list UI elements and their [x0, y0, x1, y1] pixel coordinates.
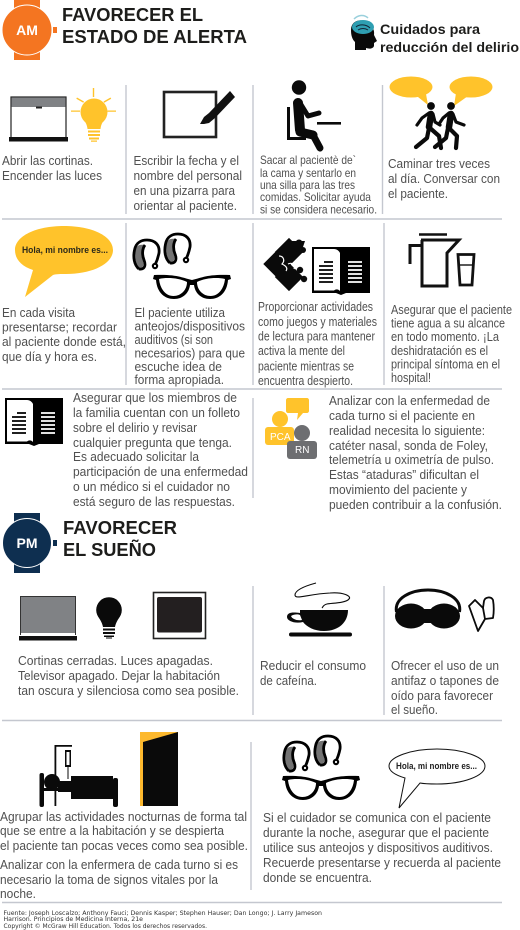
text: agrupar actividades: Agrupar las actividades nocturnas de forma tal [0, 810, 247, 824]
heading: favorecer el sueño: FAVORECER [63, 518, 177, 538]
text: asegurar agua: tiene agua a su alcance [391, 316, 505, 330]
icon: coffee cup [287, 583, 352, 636]
icon: television off [154, 592, 206, 638]
icon: lit light bulb [71, 88, 116, 142]
panel: agrupar actividades nocturnas [0, 732, 248, 901]
panel: escribir en la pizarra [134, 91, 242, 213]
PM badge [2, 513, 57, 573]
panel: caminar y conversar [388, 76, 500, 201]
text: caminar tres veces [388, 157, 500, 201]
text: si el cuidador: Si el cuidador se comunica con el paciente [263, 811, 491, 825]
text: asegurar folleto: participación de una enfermedad [73, 465, 248, 479]
icon: whiteboard and marker [164, 91, 235, 137]
icon: glasses [153, 275, 231, 299]
title: cuidados para reducción del delirio: reducción del delirio [380, 40, 519, 55]
text: el paciente utiliza: El paciente utiliza [134, 306, 225, 320]
title: cuidados para reducción del delirio [380, 22, 519, 55]
text: el paciente utiliza: anteojos/dispositivos [134, 320, 245, 334]
AM badge: AM [16, 22, 38, 38]
icon: head with brain [351, 15, 377, 50]
text: analizar ataduras: movimiento del paciente y [329, 483, 468, 497]
icon: hospital bed with IV [40, 745, 118, 807]
heading: favorecer el sueño: EL SUEÑO [63, 539, 156, 560]
text: sacar al paciente: la cama y sentarlo en [260, 166, 356, 180]
text: analizar ataduras: Estas “ataduras” dificultan el [329, 468, 479, 482]
icon: hearing aids [284, 736, 340, 771]
text: ofrecer antifaz: el sueño. [391, 703, 438, 717]
text: el paciente utiliza: necesarios) para que [134, 346, 245, 360]
icon: puzzle pieces [263, 238, 307, 291]
text: en cada visita: al paciente donde está, [2, 335, 126, 349]
text: asegurar folleto [73, 391, 248, 509]
panel: presentarse en cada visita [2, 226, 126, 364]
text: el paciente utiliza [134, 306, 245, 387]
text: reducir el consumo: de cafeína. [260, 674, 317, 688]
panel: anteojos y dispositivos auditivos [134, 234, 245, 387]
icon: outlined speech bubble [389, 749, 485, 808]
text: si el cuidador [263, 811, 501, 885]
text: proporcionar actividades: activa la mente del [258, 344, 345, 358]
icon: PCA and RN staff: PCA [270, 432, 291, 443]
icon: outlined speech bubble: Hola, mi nombre es... [396, 761, 477, 772]
text: proporcionar actividades: Proporcionar actividades [258, 300, 373, 314]
icon: door ajar [140, 732, 178, 806]
icon: sleep mask [395, 590, 460, 628]
icon: PCA and RN staff: RN [295, 445, 309, 456]
panel: antifaz y tapones [391, 590, 499, 717]
text: sacar al paciente: si se considera necesario. [260, 202, 377, 216]
text: asegurar folleto: Asegurar que los miembros de [73, 391, 237, 405]
text: reducir el consumo [260, 659, 366, 688]
icon: glasses [282, 776, 360, 800]
text: caminar tres veces: el paciente. [388, 187, 448, 201]
icon: unlit light bulb [96, 597, 122, 638]
text: asegurar agua: principal síntoma en el [391, 358, 500, 372]
icon: PCA and RN staff [265, 398, 317, 459]
text: analizar ataduras: pueden contribuir a la confusión. [329, 498, 502, 512]
panel: comunicación nocturna [263, 736, 501, 885]
heading: favorecer el estado de alerta: ESTADO DE ALERTA [62, 27, 247, 47]
text: si el cuidador: donde se encuentra. [263, 871, 372, 885]
text: si el cuidador: Recuerde presentarse y recuerda al paciente [263, 856, 501, 870]
source note: Harrison. Principios de Medicina Interna, 21e [4, 916, 143, 923]
panel: reducir cafeína [260, 583, 366, 688]
text: proporcionar actividades: encuentra despierto. [258, 374, 353, 388]
text: sacar al paciente: comidas. Solicitar ayuda [260, 190, 371, 204]
text: agrupar actividades: que se entre a la habitación y se despierta [0, 824, 224, 838]
text: caminar tres veces: al día. Conversar con [388, 172, 500, 186]
text: ofrecer antifaz [391, 659, 499, 717]
text: agrupar actividades: Analizar con la enfermera de cada turno si es [0, 858, 238, 872]
text: cortinas cerradas: tan oscura y silenciosa como sea posible. [18, 684, 239, 698]
text: en cada visita: que día y hora es. [2, 350, 97, 364]
text: cortinas cerradas [18, 654, 239, 698]
text: proporcionar actividades: como juegos y materiales [258, 315, 377, 329]
text: en cada visita [2, 306, 126, 364]
panel: agua al alcance [391, 234, 512, 385]
text: si el cuidador: utilice sus anteojos y dispositivos auditivos. [263, 841, 493, 855]
text: escribir la fecha: nombre del personal [134, 169, 242, 183]
text: el paciente utiliza: auditivos (si son [134, 333, 213, 347]
text: proporcionar actividades [258, 300, 377, 388]
icon: open curtain window [9, 97, 68, 142]
text: cortinas cerradas: Cortinas cerradas. Luces apagadas. [18, 654, 213, 668]
text: asegurar agua: deshidratación es el [391, 344, 488, 358]
text: asegurar folleto: cualquier pregunta que tenga. [73, 436, 232, 450]
text: abrir las cortinas: Abrir las cortinas. [2, 154, 93, 168]
icon: closed curtain window [19, 596, 77, 640]
source note: Copyright © McGraw Hill Education. Todos los derechos reservados. [4, 923, 207, 930]
source note [4, 910, 322, 930]
panel: analizar con la enfermedad [265, 394, 502, 512]
icon: hearing aids [134, 234, 190, 269]
text: si el cuidador: durante la noche, asegurar que el paciente [263, 826, 489, 840]
text: caminar tres veces: Caminar tres veces [388, 157, 490, 171]
text: agrupar actividades [0, 810, 248, 901]
text: analizar ataduras: cada turno si el paciente en [329, 409, 475, 423]
text: escribir la fecha: Escribir la fecha y el [134, 154, 239, 168]
AM badge [2, 0, 57, 60]
text: asegurar folleto: sobre el delirio y revisar [73, 421, 197, 435]
panel: habitación oscura [18, 592, 239, 698]
text: sacar al paciente: una silla para las tres [260, 178, 355, 192]
text: analizar ataduras: telemetría u oximetría de pulso. [329, 453, 494, 467]
heading: favorecer el estado de alerta [62, 5, 247, 47]
heading: favorecer el estado de alerta: FAVORECER EL [62, 5, 203, 25]
icon: water jug and glass [410, 234, 474, 286]
icon: yellow speech bubble: Hola, mi nombre es... [22, 245, 108, 256]
text: ofrecer antifaz: oído para favorecer [391, 689, 493, 703]
text: escribir la fecha: en una pizarra para [134, 184, 235, 198]
icon: speech bubbles [390, 76, 492, 106]
icon: two people walking [416, 102, 464, 148]
icon: earplugs [469, 597, 494, 631]
text: abrir las cortinas [2, 154, 102, 183]
text: el paciente utiliza: forma apropiada. [134, 373, 224, 387]
text: escribir la fecha [134, 154, 242, 213]
text: sacar al paciente: Sacar al pacientè de` [260, 153, 356, 167]
text: reducir el consumo: Reducir el consumo [260, 659, 366, 673]
text: en cada visita: presentarse; recordar [2, 320, 117, 334]
text: proporcionar actividades: paciente mientras se [258, 360, 354, 374]
text: analizar ataduras: realidad necesita lo siguiente: [329, 424, 485, 438]
text: asegurar agua: hospital! [391, 371, 431, 385]
text: escribir la fecha: orientar al paciente. [134, 199, 237, 213]
text: proporcionar actividades: de lectura para mantener [258, 330, 375, 344]
text: asegurar folleto: o un médico si el cuidador no [73, 480, 230, 494]
PM badge: PM [16, 535, 38, 551]
text: asegurar folleto: está seguro de las respuestas. [73, 495, 235, 509]
heading: favorecer el sueño [63, 518, 177, 560]
panel: juegos y lectura [258, 238, 377, 388]
text: agrupar actividades: noche. [0, 887, 36, 901]
text: agrupar actividades: necesario la toma de signos vitales por la [0, 873, 218, 887]
source note: Fuente: Joseph Loscalzo; Anthony Fauci; Dennis Kasper; Stephen Hauser; Dan Longo; J. Larry Jameson [4, 910, 322, 917]
panel: folleto para la familia [5, 391, 248, 509]
text: asegurar agua: en todo momento. ¡La [391, 330, 499, 344]
icon: booklet [5, 398, 63, 446]
text: analizar ataduras: Analizar con la enfermedad de [329, 394, 490, 408]
text: asegurar agua [391, 303, 512, 385]
text: analizar ataduras [329, 394, 502, 512]
icon: seated person at table [288, 80, 341, 148]
panel: abrir las cortinas [2, 88, 116, 183]
text: abrir las cortinas: Encender las luces [2, 169, 102, 183]
text: en cada visita: En cada visita [2, 306, 75, 320]
text: cortinas cerradas: Televisor apagado. Dejar la habitación [18, 669, 220, 683]
icon: open book [312, 247, 370, 295]
text: analizar ataduras: catéter nasal, sonda de Foley, [329, 439, 488, 453]
text: asegurar folleto: Es adecuado solicitar la [73, 450, 199, 464]
title: cuidados para reducción del delirio: Cuidados para [380, 22, 481, 37]
text: ofrecer antifaz: antifaz o tapones de [391, 674, 499, 688]
text: el paciente utiliza: escuche idea de [134, 360, 222, 374]
text: asegurar folleto: la familia cuentan con un folleto [73, 406, 240, 420]
text: agrupar actividades: el paciente tan pocas veces como sea posible. [0, 839, 248, 853]
text: ofrecer antifaz: Ofrecer el uso de un [391, 659, 499, 673]
text: sacar al paciente [260, 153, 377, 216]
panel: sentar al paciente [260, 80, 377, 216]
